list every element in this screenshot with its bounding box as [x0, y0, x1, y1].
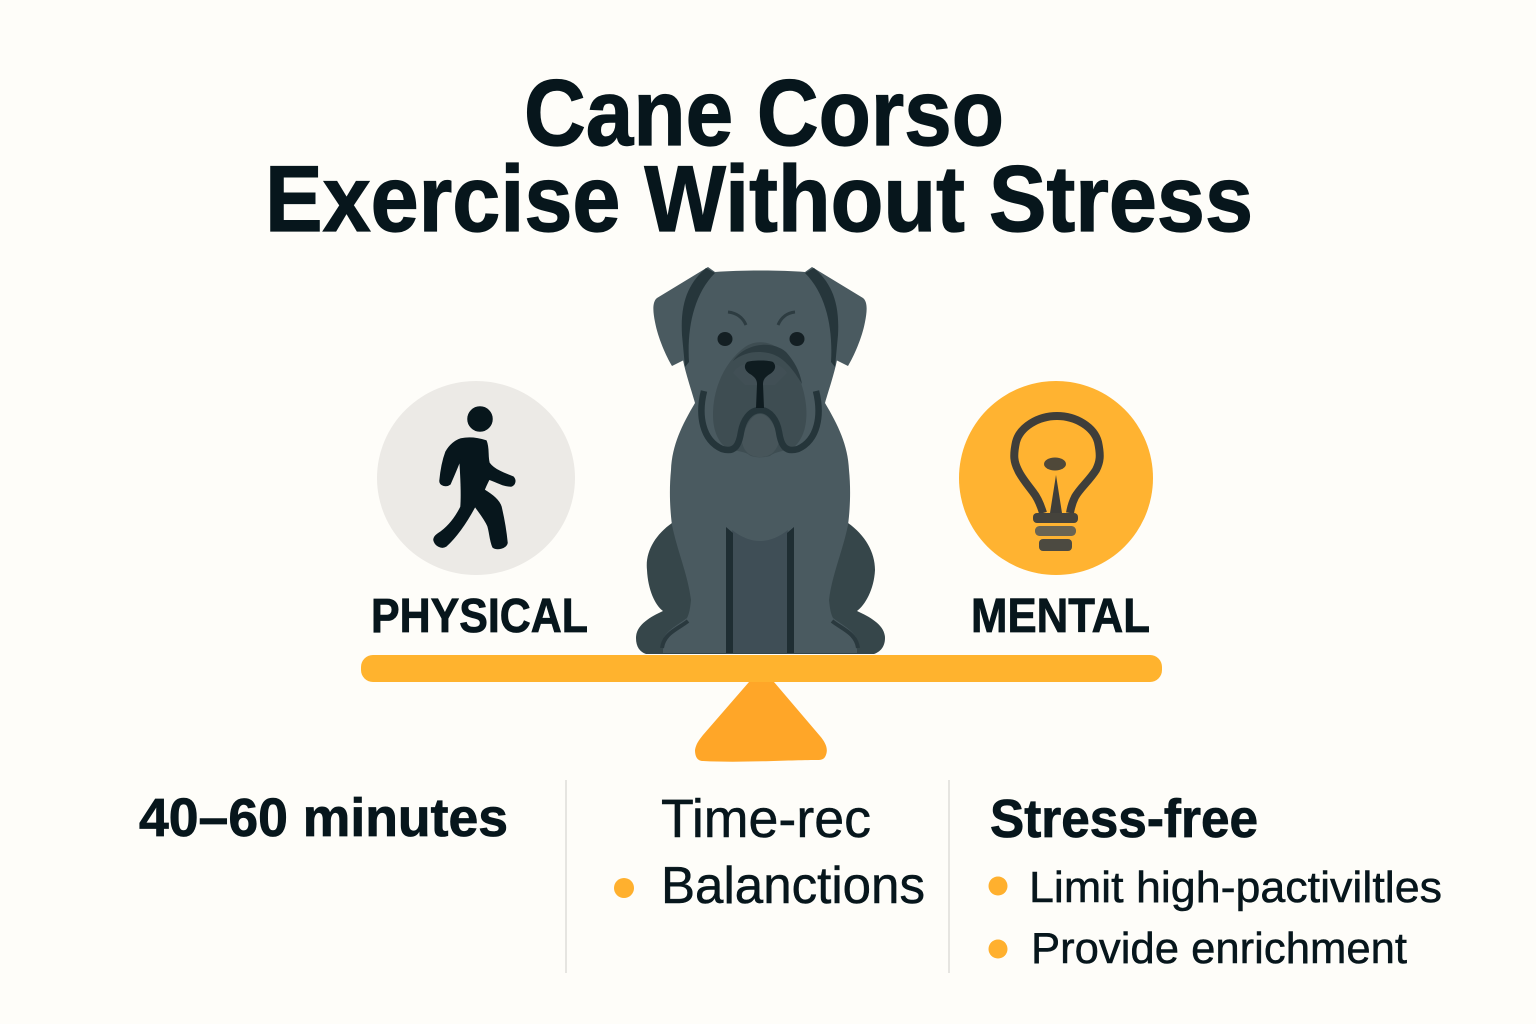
muzzle: [713, 342, 806, 457]
bullet: [988, 940, 1008, 958]
balanctions text: Balanctions: [661, 857, 925, 915]
haunch lines: [662, 621, 858, 648]
icon: light bulb: [1014, 416, 1100, 551]
chin: [742, 414, 779, 457]
panel: physical: [371, 381, 588, 643]
jowl lines: [701, 391, 819, 450]
dog: [636, 267, 885, 654]
title: [265, 60, 1253, 251]
body and head: [663, 270, 857, 653]
column: balance: [614, 789, 925, 915]
icon: walking person: [434, 407, 515, 548]
eyes: [718, 332, 804, 346]
chest panel: [732, 530, 788, 653]
balance scale: [361, 655, 1162, 762]
ear folds: [682, 268, 838, 367]
hind legs: [636, 523, 885, 654]
bullet: [988, 876, 1008, 896]
title: Cane Corso: [524, 60, 1004, 165]
mental label: MENTAL: [971, 590, 1150, 643]
time-rec text: Time-rec: [661, 789, 871, 849]
eyebrows: [728, 312, 795, 325]
nose: [745, 360, 775, 408]
divider: [948, 780, 950, 973]
mental circle: [959, 381, 1153, 575]
panel: mental: [959, 381, 1153, 643]
physical circle: [377, 381, 575, 575]
title: Exercise Without Stress: [265, 146, 1253, 251]
plank: [361, 655, 1162, 682]
divider: [565, 780, 567, 973]
ears: [653, 267, 867, 366]
column: stress-free: [988, 789, 1442, 973]
limit text: Limit high-pactiviltles: [1029, 863, 1442, 912]
leg lines: [726, 527, 794, 653]
stress-free heading: Stress-free: [990, 789, 1258, 849]
brow band: [733, 345, 802, 384]
physical label: PHYSICAL: [371, 590, 588, 643]
enrichment text: Provide enrichment: [1031, 924, 1407, 973]
bullet: [614, 878, 634, 898]
fulcrum: [695, 682, 827, 762]
snout top: [733, 362, 787, 385]
column: duration: 40–60 minutes: [139, 788, 508, 848]
